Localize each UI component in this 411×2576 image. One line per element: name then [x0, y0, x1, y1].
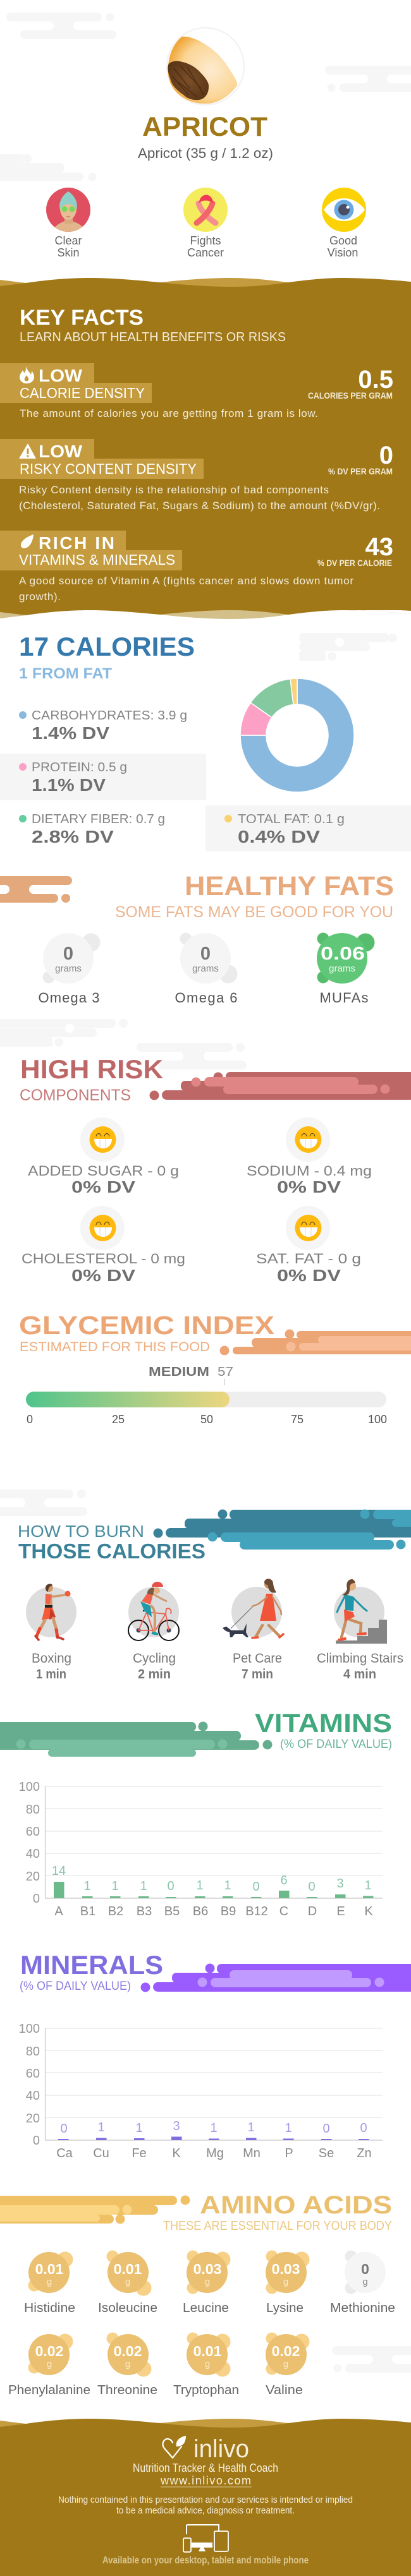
bar chart: vitamins: B12 — [245, 1905, 268, 1918]
decoration — [0, 1722, 272, 1757]
heading: amino acids: AMINO ACIDS — [200, 2191, 392, 2219]
nutrient: dietary fiber: 2.8% DV — [32, 827, 114, 846]
benefit: fights cancer — [183, 188, 228, 232]
panel: glycemic index — [19, 1311, 411, 1426]
item: threonine: g — [125, 2359, 130, 2369]
subheading: (% OF DAILY VALUE) — [20, 1980, 131, 1993]
label: vision: Vision — [328, 246, 358, 259]
bar chart: vitamins: 1 — [83, 1879, 91, 1893]
label: climbing stairs: Climbing Stairs — [317, 1651, 403, 1666]
item: cholesterol — [21, 1206, 185, 1285]
rating: LOW — [39, 366, 83, 385]
panel: footer — [0, 2419, 411, 2576]
bar chart: minerals: 0 — [322, 2122, 330, 2136]
fact: low calorie density — [0, 363, 393, 419]
panel: calories — [0, 632, 411, 852]
bar chart: minerals: K — [172, 2146, 181, 2160]
icon: devices — [183, 2525, 228, 2552]
description line 2: (Cholesterol, Saturated Fat, Sugars & Sodium) to the amount (%DV/gr). — [19, 500, 380, 512]
bar chart: minerals: 0 — [60, 2122, 68, 2136]
item: isoleucine — [98, 2250, 157, 2315]
label: skin: Skin — [57, 246, 80, 259]
bar chart: minerals: 100 — [19, 2022, 40, 2036]
bar chart: vitamins: 60 — [26, 1825, 40, 1839]
website: www.inlivo.com — [160, 2474, 251, 2487]
item: tryptophan: 0.01 — [193, 2343, 222, 2359]
bar chart: vitamins: B9 — [221, 1905, 236, 1918]
value: 0 — [379, 442, 393, 469]
value: 0.5 — [358, 366, 393, 394]
activity: cycling — [128, 1582, 179, 1640]
item: mufas — [317, 932, 374, 1006]
bar chart: vitamins: 0 — [167, 1879, 175, 1893]
item: phenylalanine — [8, 2333, 90, 2397]
item: saturated fat — [256, 1206, 361, 1285]
nutrient: protein: PROTEIN: 0.5 g — [32, 761, 127, 774]
decoration — [0, 876, 72, 903]
bar chart: minerals: Zn — [357, 2146, 372, 2160]
description line 1: A good source of Vitamin A (fights cancer and slows down tumor — [19, 575, 353, 587]
bar chart: minerals: 1 — [247, 2121, 255, 2134]
gauge scale — [27, 1413, 387, 1426]
item: threonine: 0.02 — [114, 2343, 142, 2359]
item: valine: g — [283, 2359, 288, 2369]
bar chart: vitamins: C — [279, 1905, 288, 1918]
icon: flame — [20, 366, 34, 383]
panel: high risk — [20, 1054, 411, 1285]
heading: glycemic index: GLYCEMIC INDEX — [19, 1311, 274, 1340]
bar chart: minerals: Ca — [56, 2146, 73, 2160]
bar chart: vitamins: B6 — [193, 1905, 208, 1918]
item: added sugar: 0% DV — [71, 1177, 136, 1196]
subheading: from fat: 1 FROM FAT — [19, 665, 112, 682]
disclaimer line 1: Nothing contained in this presentation and our services is intended or implied — [58, 2495, 353, 2505]
nutrient: total fat: 0.4% DV — [238, 827, 320, 846]
activity: climbing stairs — [334, 1579, 387, 1644]
item: cholesterol: 0% DV — [71, 1266, 136, 1285]
availability note: Available on your desktop, tablet and mobile phone — [102, 2555, 309, 2566]
bar chart: vitamins: B3 — [137, 1905, 152, 1918]
bar chart: minerals: 40 — [26, 2089, 40, 2103]
bar chart: vitamins: B2 — [108, 1905, 123, 1918]
title: APRICOT — [142, 112, 267, 142]
bar chart: vitamins: K — [364, 1905, 373, 1918]
benefit: good vision — [322, 188, 366, 232]
bar chart: minerals: 3 — [173, 2119, 180, 2133]
nutrient: dietary fiber: DIETARY FIBER: 0.7 g — [32, 812, 165, 826]
bar chart: minerals: 0 — [360, 2121, 367, 2135]
subheading: ESTIMATED FOR THIS FOOD — [20, 1340, 210, 1354]
bar chart: vitamins: 14 — [52, 1864, 66, 1878]
item: methionine — [330, 2250, 395, 2315]
item: valine: Valine — [266, 2383, 303, 2397]
bar chart: vitamins: 1 — [224, 1879, 231, 1893]
fact: low risky content density — [0, 439, 393, 512]
icon: leaf — [21, 534, 34, 548]
disclaimer line 2: to be a medical advice, diagnosis or treatment. — [116, 2505, 295, 2516]
subheading: SOME FATS MAY BE GOOD FOR YOU — [115, 903, 393, 921]
name: CALORIE DENSITY — [20, 385, 145, 401]
gauge scale: 100 — [368, 1413, 387, 1426]
item: phenylalanine: g — [47, 2359, 52, 2369]
bar chart: minerals: 60 — [26, 2067, 40, 2081]
item: mufas: MUFAs — [320, 990, 368, 1006]
description line 2: growth). — [19, 591, 61, 603]
name: RISKY CONTENT DENSITY — [20, 460, 197, 477]
item: added sugar — [28, 1117, 179, 1196]
panel: vitamins — [0, 1708, 392, 1918]
serving size: Apricot (35 g / 1.2 oz) — [138, 145, 273, 161]
activity: boxing — [26, 1584, 77, 1640]
description line 1: Risky Content density is the relationship of bad components — [19, 484, 329, 496]
icon: warning — [19, 443, 36, 459]
nutrient: total fat: TOTAL FAT: 0.1 g — [238, 812, 345, 826]
item: tryptophan: g — [205, 2359, 210, 2369]
heading line 2: THOSE CALORIES — [18, 1539, 206, 1563]
item: omega 3 — [38, 933, 100, 1006]
gauge label: MEDIUM — [149, 1365, 209, 1379]
item: sodium — [247, 1117, 372, 1196]
heading line 1: HOW TO BURN — [18, 1522, 144, 1541]
nutrient: protein: 1.1% DV — [32, 775, 106, 795]
bar chart: vitamins: 6 — [280, 1874, 288, 1887]
minutes: pet care: 7 min — [242, 1667, 273, 1682]
bar chart: vitamins: 80 — [26, 1803, 40, 1817]
item: histidine: g — [47, 2277, 52, 2287]
item: omega 6 — [175, 932, 238, 1006]
bar chart: minerals: 80 — [26, 2045, 40, 2059]
item: cholesterol: CHOLESTEROL - 0 mg — [21, 1251, 185, 1267]
minutes: boxing: 1 min — [36, 1667, 66, 1682]
logo: inlivo: inlivo — [193, 2435, 249, 2463]
value: 43 — [365, 533, 393, 561]
bar chart: vitamins: E — [336, 1905, 345, 1918]
panel: amino acids — [0, 2191, 395, 2397]
label: good: Good — [329, 234, 357, 247]
item: histidine — [24, 2251, 75, 2315]
item: saturated fat: 0% DV — [277, 1266, 341, 1285]
bar chart: minerals — [19, 2022, 383, 2160]
item: lysine: g — [283, 2277, 288, 2287]
item: isoleucine: Isoleucine — [98, 2301, 157, 2315]
item: phenylalanine: Phenylalanine — [8, 2383, 90, 2397]
heading: high risk: HIGH RISK — [20, 1054, 163, 1084]
label: clear skin: Clear — [54, 234, 82, 247]
bar chart: vitamins: D — [308, 1905, 317, 1918]
minutes: cycling: 2 min — [138, 1667, 171, 1682]
logo: inlivo — [163, 2435, 249, 2463]
nutrient: carbohydrates: 1.4% DV — [32, 723, 109, 743]
item: phenylalanine: 0.02 — [35, 2343, 63, 2359]
bar chart: minerals: 1 — [97, 2121, 105, 2134]
item: tryptophan — [173, 2332, 239, 2397]
bar chart: minerals: 1 — [285, 2121, 292, 2135]
label: fights: Fights — [190, 234, 221, 247]
bar chart: vitamins: B5 — [164, 1905, 180, 1918]
item: mufas: grams — [329, 963, 355, 974]
bar chart: minerals: 1 — [135, 2121, 143, 2135]
item: sodium: 0% DV — [277, 1177, 341, 1196]
item: lysine — [266, 2250, 310, 2315]
bar chart: minerals: P — [285, 2146, 293, 2160]
item: isoleucine: 0.01 — [114, 2261, 142, 2277]
item: leucine — [183, 2250, 230, 2315]
nutrient: protein — [19, 761, 127, 795]
item: threonine: Threonine — [97, 2383, 157, 2397]
gauge scale: 75 — [291, 1413, 304, 1426]
donut chart — [240, 678, 354, 792]
gauge scale: 50 — [200, 1413, 213, 1426]
subheading: (% OF DAILY VALUE) — [280, 1738, 392, 1751]
item: omega 6: 0 — [200, 944, 211, 964]
bar chart: vitamins: 0 — [308, 1880, 316, 1894]
item: mufas: 0.06 — [321, 944, 365, 964]
bar chart: minerals: 0 — [33, 2134, 40, 2148]
heading: vitamins: VITAMINS — [255, 1708, 392, 1738]
item: omega 6: Omega 6 — [175, 990, 238, 1006]
item: omega 3: 0 — [63, 944, 73, 964]
bar chart: vitamins: 1 — [111, 1879, 119, 1893]
decoration — [0, 2196, 190, 2224]
nutrient: dietary fiber — [19, 812, 165, 846]
unit: CALORIES PER GRAM — [308, 390, 393, 400]
label: pet care: Pet Care — [233, 1651, 282, 1666]
item: methionine: Methionine — [330, 2301, 395, 2315]
item: histidine: Histidine — [24, 2301, 75, 2315]
panel: healthy fats — [0, 871, 394, 1006]
unit: % DV PER GRAM — [328, 466, 393, 476]
bar chart: minerals: 1 — [210, 2121, 218, 2135]
label: cancer: Cancer — [187, 246, 224, 259]
heading: key facts: KEY FACTS — [20, 306, 144, 330]
bar chart: minerals: Se — [319, 2146, 334, 2160]
decoration — [140, 1963, 411, 1992]
panel: key facts — [0, 278, 411, 627]
item: leucine: 0.03 — [193, 2261, 221, 2277]
benefit: clear skin — [46, 188, 90, 232]
item: methionine: 0 — [361, 2261, 369, 2277]
subheading: THESE ARE ESSENTIAL FOR YOUR BODY — [163, 2219, 392, 2233]
item: leucine: Leucine — [183, 2301, 229, 2315]
item: threonine — [97, 2332, 157, 2397]
bar chart: vitamins: B1 — [80, 1905, 95, 1918]
item: saturated fat: SAT. FAT - 0 g — [256, 1251, 361, 1267]
subheading: COMPONENTS — [20, 1086, 131, 1104]
item: sodium: SODIUM - 0.4 mg — [247, 1163, 372, 1179]
item: leucine: g — [205, 2277, 210, 2287]
nutrient: carbohydrates: CARBOHYDRATES: 3.9 g — [32, 709, 187, 723]
bar chart: minerals: Fe — [132, 2146, 147, 2160]
description: The amount of calories you are getting from 1 gram is low. — [20, 407, 318, 419]
bar chart: vitamins: 3 — [336, 1877, 344, 1891]
item: omega 3: Omega 3 — [38, 990, 100, 1006]
gauge bar — [26, 1392, 386, 1407]
item: valine — [266, 2332, 310, 2397]
heading: minerals: MINERALS — [20, 1950, 163, 1980]
panel: how to burn those calories — [18, 1510, 411, 1682]
gauge scale: 25 — [112, 1413, 125, 1426]
label: boxing: Boxing — [32, 1651, 71, 1666]
item: methionine: g — [362, 2277, 368, 2287]
rating: LOW — [39, 442, 83, 461]
bar chart: vitamins: 20 — [26, 1870, 40, 1884]
decoration — [153, 1510, 411, 1550]
bar chart: vitamins: A — [54, 1905, 63, 1918]
bar chart: minerals: Cu — [93, 2146, 109, 2160]
item: added sugar: ADDED SUGAR - 0 g — [28, 1163, 179, 1179]
heading: calories: 17 CALORIES — [19, 632, 195, 661]
decoration — [220, 1329, 411, 1356]
item: omega 3: grams — [55, 963, 82, 974]
food image: apricot — [167, 28, 244, 105]
gauge scale: 0 — [27, 1413, 33, 1426]
item: isoleucine: g — [125, 2277, 130, 2287]
subheading: LEARN ABOUT HEALTH BENEFITS OR RISKS — [20, 330, 286, 344]
fact: rich in vitamins and minerals — [0, 531, 393, 603]
bar chart: vitamins — [19, 1780, 383, 1918]
bar chart: vitamins: 1 — [364, 1879, 372, 1893]
minutes: climbing stairs: 4 min — [343, 1667, 376, 1682]
gauge value: 57 — [218, 1365, 233, 1379]
bar chart: minerals: 20 — [26, 2112, 40, 2126]
label: cycling: Cycling — [133, 1651, 176, 1666]
bar chart: vitamins: 0 — [33, 1892, 40, 1906]
bar chart: vitamins: 1 — [196, 1879, 204, 1893]
name: VITAMINS & MINERALS — [19, 551, 175, 568]
nutrient: carbohydrates — [19, 709, 187, 743]
item: lysine: Lysine — [266, 2301, 304, 2315]
unit: % DV PER CALORIE — [317, 558, 392, 568]
item: lysine: 0.03 — [272, 2261, 300, 2277]
bar chart: vitamins: 100 — [19, 1780, 40, 1794]
rating: RICH IN — [39, 533, 114, 553]
bar chart: minerals: Mn — [243, 2146, 261, 2160]
bar chart: vitamins: 40 — [26, 1847, 40, 1861]
item: valine: 0.02 — [272, 2343, 300, 2359]
bar chart: minerals: Mg — [206, 2146, 224, 2160]
activity: pet care — [223, 1579, 283, 1638]
item: tryptophan: Tryptophan — [173, 2383, 239, 2397]
tagline: Nutrition Tracker & Health Coach — [133, 2462, 278, 2474]
item: omega 6: grams — [192, 963, 219, 974]
nutrient: total fat — [224, 812, 345, 846]
decoration — [149, 1072, 411, 1100]
panel: minerals — [19, 1950, 411, 2160]
bar chart: vitamins: 1 — [140, 1879, 147, 1893]
heading: healthy fats: HEALTHY FATS — [185, 871, 394, 901]
bar chart: vitamins: 0 — [252, 1880, 260, 1894]
item: histidine: 0.01 — [35, 2261, 64, 2277]
